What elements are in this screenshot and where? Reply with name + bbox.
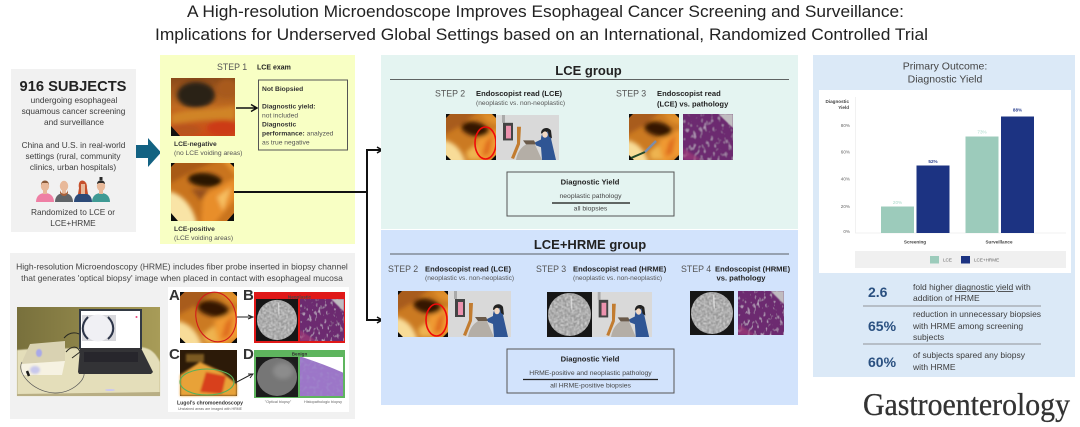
stat: 60 percent — [868, 350, 1026, 372]
panel: study population — [11, 69, 136, 232]
image: HRME view — [690, 291, 734, 335]
arrow: negative to not biopsied — [236, 104, 257, 112]
panel letter labels: A — [169, 287, 180, 304]
formula: diagnostic yield: Diagnostic Yield — [561, 178, 620, 186]
heading: LCE+HRME group: LCE+HRME group — [534, 237, 646, 252]
heading: primary outcome — [903, 60, 987, 86]
image: pathology — [683, 114, 733, 160]
step 2 label — [435, 88, 565, 107]
image B: neoplastic panel — [254, 292, 345, 343]
image D: benign panel — [254, 350, 345, 398]
caption: biopsy types — [265, 400, 342, 404]
formula: diagnostic yield: neoplastic pathology — [560, 193, 622, 200]
caption: Lugol's: Lugol's chromoendoscopy — [177, 400, 243, 406]
callout: not biopsied: as true negative — [262, 140, 310, 146]
step 3 label: Endoscopist read — [657, 89, 721, 98]
stat: 65 percent — [868, 309, 1041, 342]
text: settings: clinics, urban hospitals) — [30, 162, 116, 172]
image: endoscopy with biopsy forceps — [625, 110, 683, 164]
formula: diagnostic yield: all HRME-positive biopsies — [550, 382, 632, 390]
stat: 65 percent: reduction in unnecessary biopsies — [913, 309, 1041, 319]
panel: LCE+HRME group — [381, 230, 798, 405]
label: LCE-positive: (LCE voiding areas) — [174, 235, 233, 242]
step 3 label: (neoplastic vs. non-neoplastic) — [573, 275, 662, 282]
text: population description — [22, 95, 126, 127]
panel: HRME explanation — [10, 253, 355, 419]
label: LCE-negative: (no LCE voiding areas) — [174, 150, 242, 157]
journal logo: Gastroenterology: Gastroenterology — [863, 386, 1070, 422]
figure: A–D endoscopy and optical biopsy panel — [168, 287, 349, 412]
bars: surveillance — [966, 108, 1034, 233]
caption: Lugol's: Unstained areas are imaged with HRME — [178, 407, 243, 411]
title: Implications for Underserved Global Settings based on an International, Randomized Controlled Trial — [155, 25, 928, 44]
icon: four people — [36, 177, 110, 202]
image: endoscopist — [592, 292, 652, 337]
y axis ticks: 80% — [841, 123, 850, 128]
label: LCE-positive: LCE-positive — [174, 226, 215, 233]
panel letter labels: B — [243, 287, 254, 304]
y axis ticks: 40% — [841, 176, 850, 182]
formula: diagnostic yield: HRME-positive and neoplastic pathology — [529, 370, 652, 377]
text: randomization: LCE+HRME — [50, 218, 96, 228]
image: HRME view — [547, 292, 592, 337]
bar chart: diagnostic yield — [819, 90, 1071, 273]
text: settings: China and U.S. in real-world — [22, 140, 126, 150]
legend: LCE — [943, 258, 952, 262]
stat: 2.6 fold: fold higher diagnostic yield with — [913, 282, 1031, 292]
step 2 label: (neoplastic vs. non-neoplastic) — [425, 275, 514, 282]
callout: not biopsied — [258, 80, 348, 150]
panel letter labels: D — [243, 346, 254, 363]
panel letter labels — [169, 287, 254, 363]
formula: diagnostic yield: all biopsies — [574, 206, 608, 212]
callout: not biopsied: Diagnostic — [262, 122, 296, 128]
panel: step 1 LCE exam — [160, 55, 355, 244]
legend — [855, 251, 1066, 268]
x axis labels: Screening — [904, 240, 926, 244]
bars: screening — [881, 159, 950, 233]
y axis ticks: 60% — [841, 150, 850, 154]
step 2 label: Endoscopist read (LCE) — [476, 89, 563, 98]
heading: step 1 — [217, 62, 291, 72]
panel letter labels: C — [169, 346, 180, 363]
callout: not biopsied: not included — [262, 112, 298, 120]
image: endoscopist — [448, 291, 511, 337]
arrow: subjects to step 1 — [136, 138, 161, 167]
title: A High-resolution Microendoscope Improves Esophageal Cancer Screening and Surveillance: — [187, 2, 904, 21]
caption: biopsy types: Histopathologic biopsy — [304, 400, 342, 404]
callout: not biopsied: performance: analyzed — [262, 130, 334, 138]
panel: LCE group — [381, 55, 798, 229]
x axis labels — [904, 240, 1013, 244]
text: HRME description: that generates 'optical biopsy' image when placed in contact with esophageal mucosa — [21, 273, 343, 283]
step 3 label: Endoscopist read (HRME) — [573, 264, 667, 274]
text: population description: undergoing esophageal — [31, 95, 118, 105]
text: population description: squamous cancer screening — [22, 106, 126, 116]
image: LCE-positive endoscopy — [167, 159, 237, 225]
panel: primary outcome — [813, 55, 1075, 377]
text: settings — [22, 140, 126, 172]
callout: not biopsied: Not Biopsied — [262, 86, 303, 93]
caption: biopsy types: "Optical biopsy" — [265, 400, 292, 404]
image B: neoplastic panel: Neoplastic — [288, 294, 312, 300]
step 2 label — [388, 264, 514, 282]
legend: LCE+HRME — [974, 258, 999, 262]
stat: 60 percent: 60% — [868, 354, 897, 370]
photo: HRME device and laptop — [17, 307, 160, 396]
y axis ticks: 20% — [841, 204, 850, 209]
heading: step 1: LCE exam — [257, 64, 291, 72]
text: randomization: Randomized to LCE or — [31, 207, 115, 217]
text: randomization — [31, 207, 115, 228]
heading: primary outcome: Primary Outcome: — [903, 60, 987, 72]
arrow: C to D — [235, 374, 253, 383]
step 2 label: (neoplastic vs. non-neoplastic) — [476, 100, 565, 107]
image: endoscopy with red circle — [394, 287, 452, 341]
image C: Lugol's chromoendoscopy — [180, 350, 237, 396]
step 4 label — [681, 264, 791, 282]
label: LCE-positive — [174, 226, 233, 242]
image: pathology — [738, 291, 784, 335]
image: LCE-negative endoscopy — [169, 78, 239, 136]
stat: 65 percent: subjects — [913, 332, 944, 342]
image A: neoplastic endoscopy — [175, 288, 242, 347]
stat: 60 percent: of subjects spared any biopsy — [913, 350, 1026, 360]
y axis ticks — [841, 123, 850, 234]
bars: surveillance: 73% — [977, 130, 987, 134]
bars: surveillance: 88% — [1013, 108, 1022, 112]
heading: primary outcome: Diagnostic Yield — [908, 74, 983, 86]
caption: Lugol's — [177, 400, 243, 411]
label: LCE-negative: LCE-negative — [174, 141, 217, 148]
step 3 label — [536, 264, 667, 282]
image: endoscopist — [496, 115, 559, 160]
y axis title: Diagnostic — [826, 99, 849, 104]
text: HRME description — [16, 262, 348, 283]
step 4 label: STEP 4 — [681, 264, 711, 274]
heading: LCE group: LCE group — [555, 63, 622, 78]
step 4 label: Endoscopist (HRME) — [715, 264, 791, 274]
text: HRME description: High-resolution Microendoscopy (HRME) includes fiber probe inserted in biopsy channel — [16, 262, 348, 272]
stat: 2.6 fold: addition of HRME — [913, 293, 980, 303]
heading: 916 subjects: 916 SUBJECTS — [20, 79, 127, 95]
y axis ticks: 0% — [843, 229, 850, 234]
arrow: randomization branches — [234, 147, 382, 323]
stat: 65 percent: 65% — [868, 318, 897, 334]
step 2 label: STEP 2 — [388, 264, 418, 274]
stat: 60 percent: with HRME — [912, 362, 956, 372]
step 3 label — [616, 88, 729, 108]
step 2 label: STEP 2 — [435, 88, 465, 98]
x axis labels: Surveillance — [985, 240, 1013, 244]
step 3 label: STEP 3 — [536, 264, 566, 274]
formula: diagnostic yield — [507, 349, 674, 393]
heading: step 1: STEP 1 — [217, 62, 247, 72]
bars: screening: 20% — [893, 200, 902, 205]
y axis title — [826, 99, 849, 110]
stat: 65 percent: with HRME among screening — [912, 321, 1023, 331]
step 3 label: STEP 3 — [616, 88, 646, 98]
image D: benign panel: Benign — [292, 352, 307, 356]
text: population description: and surveillance — [44, 117, 104, 127]
stat: 2.6 fold: 2.6 — [868, 284, 888, 300]
image: endoscopy with red circle — [442, 110, 500, 164]
label: LCE-negative — [174, 141, 242, 157]
step 2 label: Endoscopist read (LCE) — [425, 264, 512, 274]
title — [155, 2, 928, 44]
callout: not biopsied: Diagnostic yield: — [262, 104, 316, 110]
bars: screening: 52% — [928, 159, 938, 164]
step 4 label: vs. pathology — [717, 274, 766, 282]
step 3 label: (LCE) vs. pathology — [657, 100, 729, 108]
y axis title: Yield — [838, 105, 849, 110]
formula: diagnostic yield: Diagnostic Yield — [561, 354, 620, 364]
arrow: A to B — [237, 315, 253, 319]
stat: 2.6 fold — [868, 282, 1031, 303]
text: settings: settings (rural, community — [26, 151, 121, 161]
formula: diagnostic yield — [507, 172, 674, 216]
